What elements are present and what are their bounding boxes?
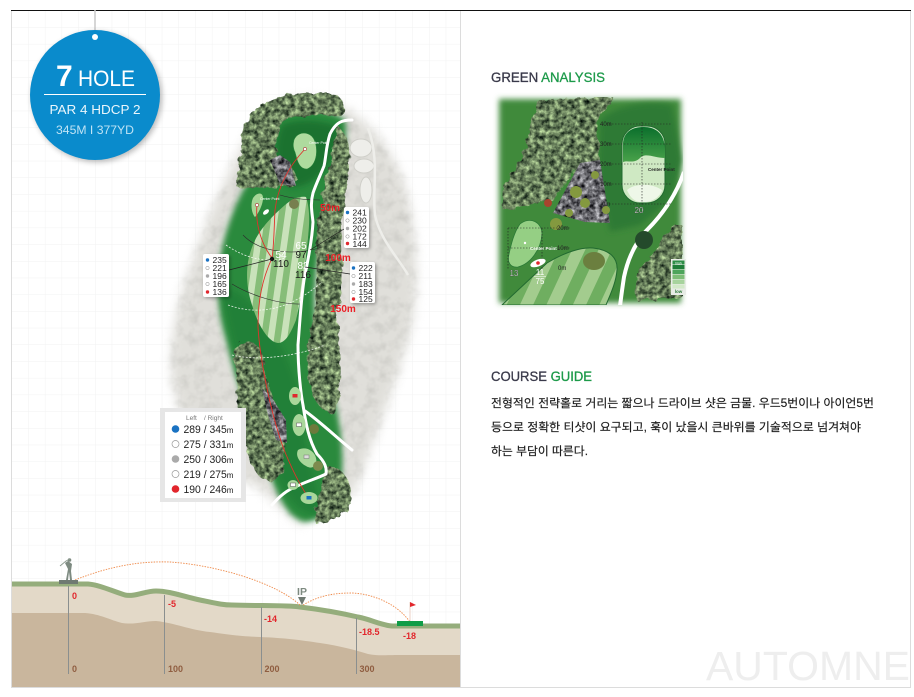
- course guide text: 등으로 정확한 티샷이 요구되고, 훅이 났을시 큰바위를 기술적으로 넘겨쳐야: [491, 420, 861, 434]
- distance markers: 50m: [320, 203, 340, 214]
- course guide text: 전형적인 전략홀로 거리는 짧으나 드라이브 샷은 금물. 우드5번이나 아이언5번: [491, 396, 874, 410]
- grid: [508, 122, 672, 270]
- heading: course guide: COURSE GUIDE: [491, 369, 592, 384]
- putting green left: [252, 194, 263, 217]
- distance lines: [68, 586, 356, 674]
- course guide text: [491, 396, 874, 458]
- green analysis map: Center Point: [648, 167, 675, 172]
- elevation labels: -5: [168, 599, 176, 609]
- slope legend: high: [675, 261, 682, 265]
- fairway yardage numbers: 54: [275, 250, 287, 261]
- callout left: 196: [212, 271, 227, 281]
- callout left: 136: [212, 287, 227, 297]
- tee legend: [160, 408, 246, 502]
- yardage arcs: [226, 245, 325, 358]
- rock outcrop lower: [262, 388, 287, 443]
- bunker: [583, 252, 605, 270]
- tee legend: 289 / 345m: [184, 424, 234, 436]
- callout lower right: [350, 262, 375, 304]
- callout top right: 202: [352, 224, 367, 234]
- green analysis map: 20: [635, 206, 644, 215]
- course map: [171, 92, 416, 525]
- hole badge: HOLE: [78, 66, 135, 91]
- callout left: 221: [212, 263, 227, 273]
- callout lower right: 154: [358, 287, 373, 297]
- distance labels: 0: [72, 664, 77, 674]
- callout left: 235: [212, 255, 227, 265]
- tee legend: / Right: [204, 415, 223, 422]
- green analysis map: 40m: [600, 122, 612, 128]
- distance markers: [320, 203, 356, 315]
- leader lines: [229, 229, 350, 274]
- hole badge: [30, 10, 162, 162]
- callout lower right: 211: [358, 271, 372, 281]
- course map: Center Point: [260, 197, 279, 201]
- callout lower right: 183: [358, 279, 373, 289]
- elevation labels: 0: [72, 591, 77, 601]
- green analysis map: 30m: [600, 142, 612, 148]
- callout top right: [344, 207, 369, 249]
- lower right trees: [636, 225, 682, 300]
- striped fairway: [502, 248, 617, 305]
- tree clusters: [233, 92, 352, 524]
- distance markers: 150m: [330, 304, 356, 315]
- striped fairway: [247, 197, 309, 343]
- putting green upper: [293, 133, 316, 169]
- elevation labels: -18: [403, 631, 416, 641]
- heading: green analysis: GREEN ANALYSIS: [491, 70, 605, 85]
- callout left: [203, 254, 229, 297]
- callout top right: 230: [352, 216, 367, 226]
- tee legend: 190 / 246m: [184, 484, 234, 496]
- slope legend: low: [675, 289, 683, 294]
- hole badge: PAR 4 HDCP 2: [50, 102, 140, 117]
- callout top right: 241: [352, 208, 367, 218]
- callout lower right: 125: [358, 294, 373, 304]
- slope legend: [671, 259, 686, 295]
- tee legend: 275 / 331m: [184, 439, 234, 451]
- fairway yardage numbers: 110: [273, 259, 289, 270]
- tee boxes: [288, 387, 323, 504]
- watermark: AUTOMNE: [706, 643, 910, 689]
- callout top right: 172: [352, 232, 367, 242]
- shot line: [257, 149, 308, 497]
- fairway yardage numbers: 82: [297, 261, 309, 272]
- apron: [598, 103, 682, 232]
- small trees: [550, 171, 610, 230]
- panel: left background grid: [12, 11, 460, 687]
- elevation labels: [72, 591, 416, 641]
- distance markers: 100m: [325, 253, 351, 264]
- fairway bunker: [289, 199, 299, 209]
- cart path: [620, 172, 684, 306]
- green analysis map: 10m: [557, 246, 569, 252]
- bunker: [262, 208, 270, 216]
- green analysis map: 20m: [557, 226, 569, 232]
- distance labels: 300: [360, 664, 375, 674]
- tee legend: 250 / 306m: [184, 454, 234, 466]
- green and flag: [397, 602, 423, 626]
- green analysis map: 10m: [600, 182, 612, 188]
- cart path: [272, 120, 352, 505]
- rocks: [553, 160, 610, 223]
- tee shot marker: [530, 258, 546, 268]
- rough bunkers: [350, 139, 374, 203]
- green analysis map: 75: [536, 277, 545, 286]
- fairway yardage numbers: 116: [295, 270, 311, 281]
- tee legend: 219 / 275m: [184, 469, 234, 481]
- green analysis map: [499, 97, 686, 306]
- green analysis map: 11: [536, 268, 545, 277]
- IP marker: [297, 586, 307, 605]
- callout lower right: 222: [358, 263, 373, 273]
- golfer icon: [59, 558, 78, 584]
- distance labels: 100: [168, 664, 183, 674]
- rough surrounds: [171, 98, 416, 525]
- hole turf: [218, 110, 346, 522]
- fairway yardage numbers: 65: [295, 241, 307, 252]
- hole badge: 345M I 377YD: [56, 125, 134, 137]
- elevation profile: [12, 558, 460, 687]
- elevation labels: -18.5: [359, 627, 380, 637]
- forest: [503, 97, 613, 210]
- fairway yardage numbers: 97: [295, 250, 307, 261]
- tee legend: Left: [186, 415, 197, 422]
- shot arcs: [75, 562, 410, 622]
- green analysis map: 0m: [558, 266, 566, 272]
- course guide text: 하는 부담이 따른다.: [491, 444, 588, 458]
- small green: [508, 220, 542, 267]
- distance labels: [72, 664, 375, 674]
- rock outcrop upper: [270, 155, 296, 186]
- green analysis map: 20m: [600, 162, 612, 168]
- callout top right: 144: [352, 239, 367, 249]
- fairway yardage numbers: [273, 241, 311, 281]
- distance labels: 200: [264, 664, 280, 674]
- IP marker: IP: [297, 586, 307, 598]
- big green: [622, 126, 665, 203]
- callout left: 165: [212, 279, 227, 289]
- hole badge: 7: [56, 60, 73, 93]
- green analysis map: 13: [510, 269, 519, 278]
- elevation labels: -14: [264, 614, 277, 624]
- course map: Center Point: [309, 141, 328, 145]
- green analysis map: Center Point: [530, 246, 557, 251]
- green analysis map: 0m: [602, 202, 610, 208]
